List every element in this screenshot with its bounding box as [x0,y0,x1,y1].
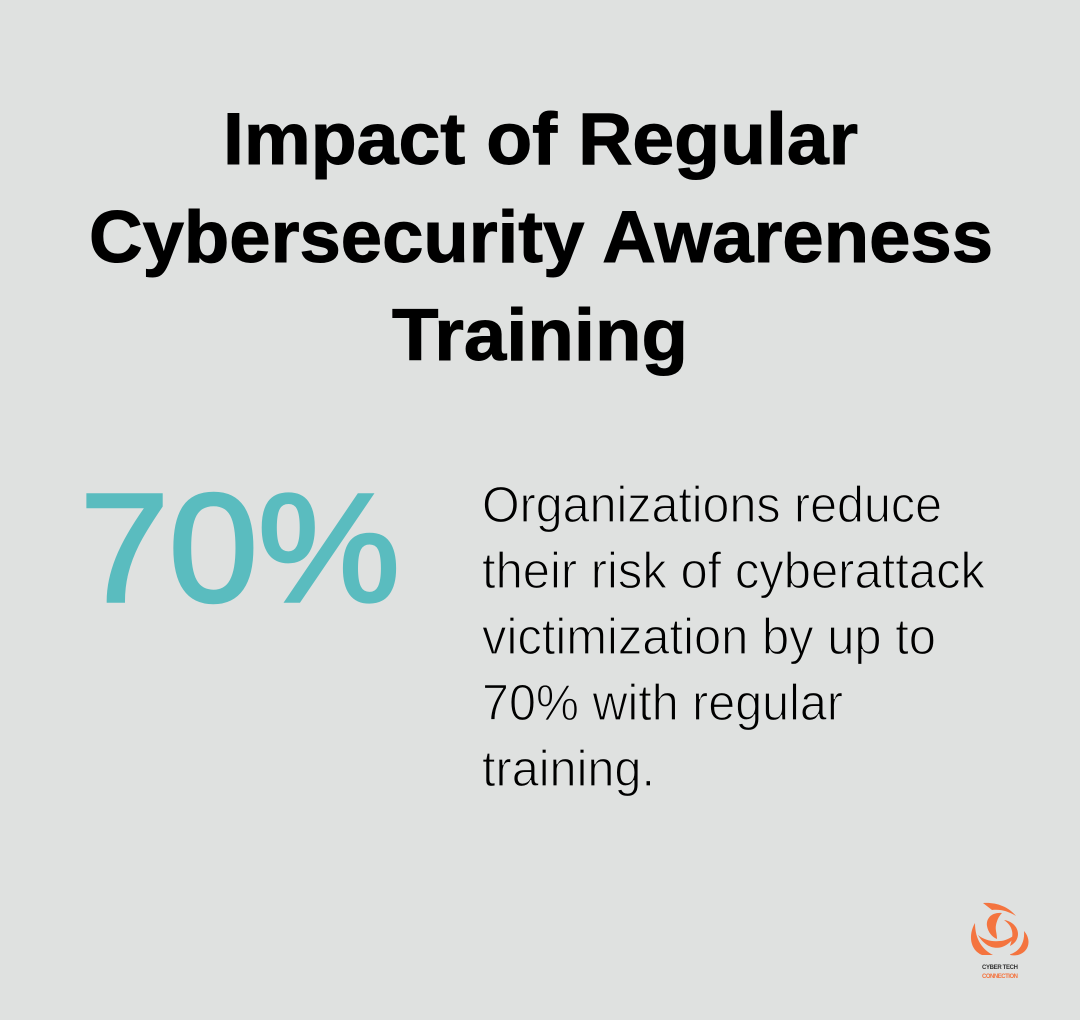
icon: three-arm swirl [971,903,1029,955]
description text: 70% with regular [482,674,843,731]
logo: Cyber Tech Connection [971,903,1029,980]
description text: Organizations reduce [482,476,942,533]
description text: training. [482,740,655,797]
logo wordmark: CONNECTION: CONNECTION [982,974,1018,980]
description text: victimization by up to [482,608,936,665]
big statistic: 70%: 70% [80,462,400,634]
logo wordmark: CYBER TECH: CYBER TECH [982,965,1018,971]
title [89,99,993,376]
description text: their risk of cyberattack [482,542,985,599]
title: Cybersecurity Awareness [89,197,993,278]
title: Training [392,295,688,376]
title: Impact of Regular [223,99,858,180]
description text [482,476,985,797]
